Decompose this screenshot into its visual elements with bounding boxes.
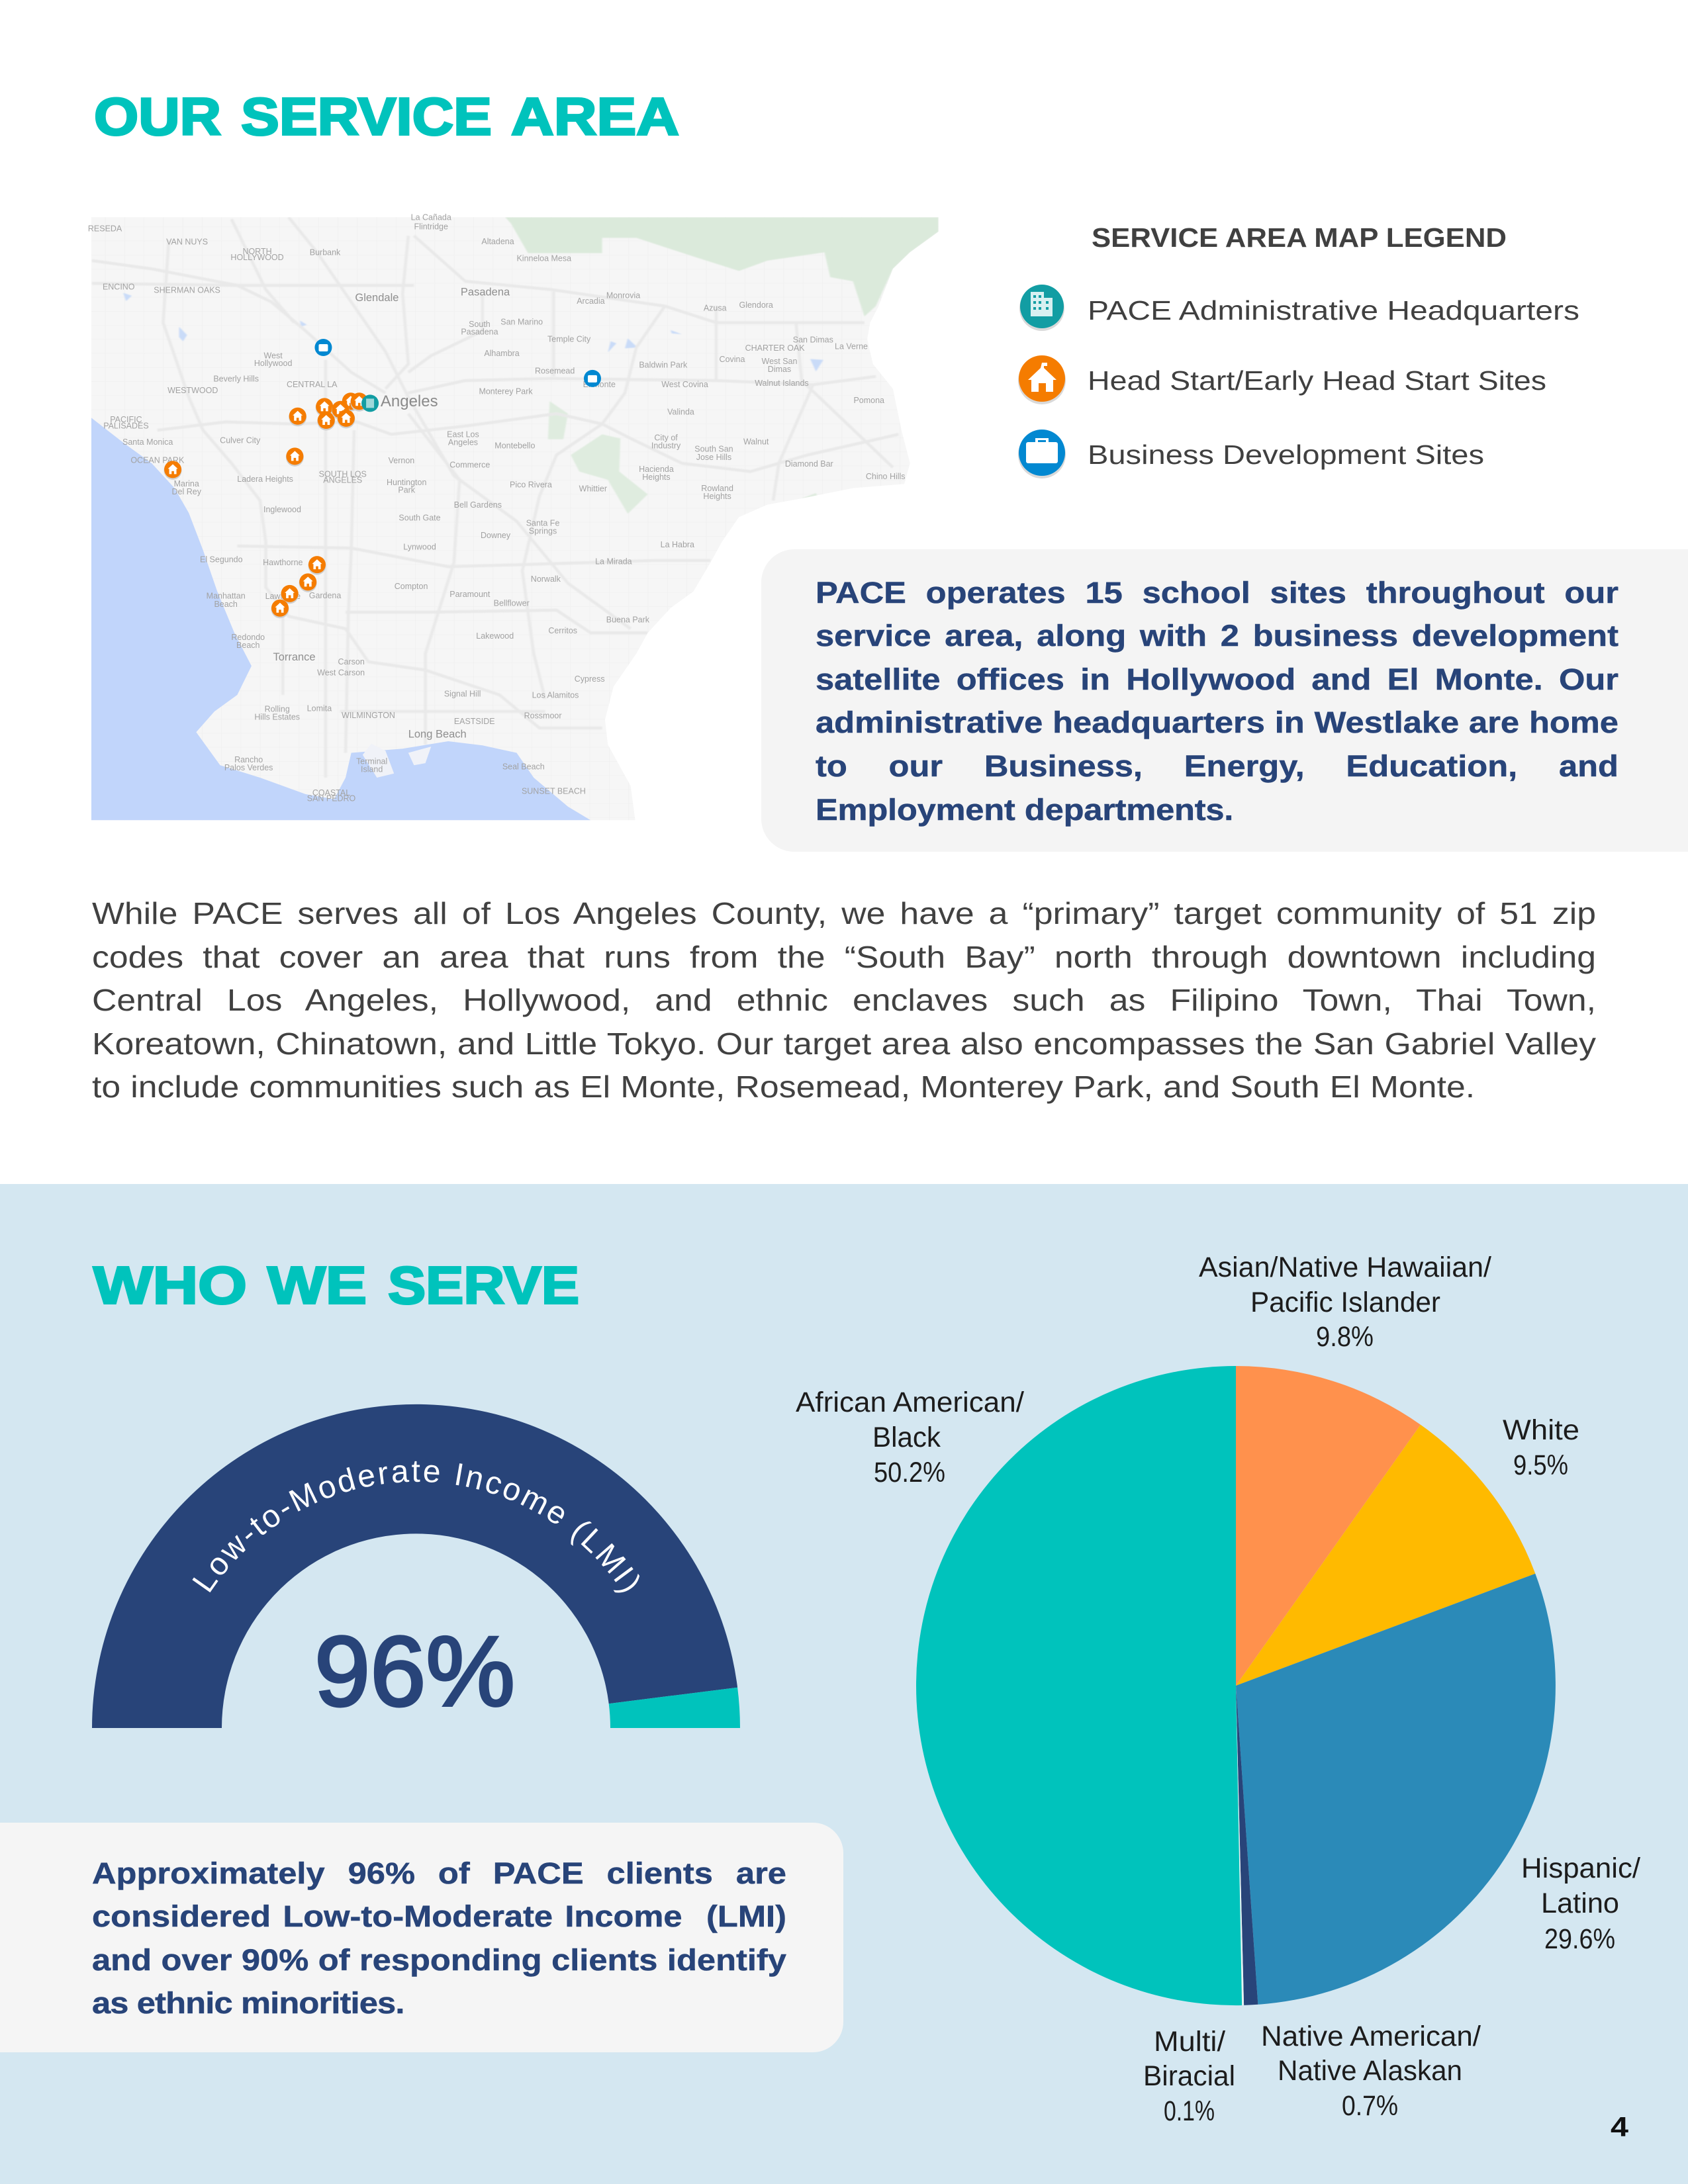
map place labels: Pomona: [853, 396, 884, 405]
title: our service area: OUR: [94, 87, 221, 146]
map place labels: SHERMAN OAKS: [154, 285, 220, 295]
map place labels: Norwalk: [531, 574, 561, 584]
pie labels: [796, 1251, 1640, 2127]
map place labels: Lakewood: [476, 631, 514, 641]
legend label: head start: Head Start/Early Head Start Sites: [1088, 365, 1546, 396]
map place labels: RESEDA: [88, 224, 122, 233]
map place labels: Altadena: [481, 237, 514, 246]
label: african american: 50.2%: [874, 1457, 945, 1488]
legend label: business development: Business Development Sites: [1088, 439, 1484, 470]
text: service area description: codes that cover an area that runs from the “South Bay” north through downtown including: [92, 940, 1596, 974]
map place labels: South Gate: [399, 513, 441, 522]
map pins: head start sites: [164, 392, 368, 618]
map place labels: PACIFIC: [110, 415, 142, 424]
map place labels: Heights: [642, 473, 671, 482]
map place labels: SOUTH LOS: [319, 470, 367, 479]
map place labels: Downey: [481, 531, 511, 540]
map place labels: CHARTER OAK: [745, 343, 805, 353]
gauge curved label: Low-to-Moderate Income (LMI): [192, 1461, 639, 1592]
map place labels: Azusa: [704, 303, 727, 312]
label: multi: Multi/: [1154, 2026, 1225, 2058]
map place labels: Manhattan: [207, 591, 246, 600]
text: service area description: Central Los Angeles, Hollywood, and ethnic enclaves such as Filipino Town, Thai Town,: [92, 983, 1596, 1017]
map place labels: Montebello: [494, 441, 535, 451]
legend icon: headquarters building: [1019, 285, 1064, 331]
map place labels: Industry: [651, 441, 681, 451]
text: service area description: Koreatown, Chinatown, and Little Tokyo. Our target area also encompasses the San Gabriel Valley: [92, 1026, 1596, 1061]
map place labels: Temple City: [547, 334, 591, 343]
map place labels: Santa Monica: [122, 437, 173, 447]
map place labels: Monterey Park: [479, 387, 533, 396]
text: pace operates: satellite offices in Hollywood and El Monte. Our: [816, 662, 1618, 696]
map place labels: Beverly Hills: [213, 374, 259, 383]
map place labels: Los Angeles: [352, 392, 438, 410]
label: african american: African American/: [796, 1387, 1024, 1418]
map place labels: Rowland: [701, 484, 733, 493]
map place labels: Dimas: [768, 365, 791, 374]
map pin: headquarters: [361, 394, 379, 412]
map place labels: Island: [361, 764, 383, 774]
text: lmi callout: [92, 1856, 786, 2020]
title: our service area: SERVICE: [241, 87, 492, 146]
map place labels: Park: [398, 485, 416, 494]
label: asian: [1199, 1251, 1491, 1353]
label: native american: 0.7%: [1342, 2090, 1398, 2122]
map place labels: Cypress: [575, 674, 605, 684]
title: our service area: AREA: [511, 87, 679, 146]
panel: lmi callout: [0, 1823, 843, 2052]
title: who we serve: WHO: [93, 1256, 247, 1314]
label: native american: Native Alaskan: [1278, 2055, 1462, 2087]
map place labels: ENCINO: [103, 282, 135, 292]
label: hispanic: Hispanic/: [1521, 1852, 1640, 1884]
map place labels: Chino Hills: [866, 472, 906, 481]
map place labels: San Dimas: [793, 335, 833, 345]
gauge: low-to-moderate income 96%: [92, 1404, 740, 1728]
map: service area: [88, 212, 941, 821]
map place labels: Whittier: [579, 484, 607, 494]
map place labels: La Habra: [661, 540, 694, 549]
map place labels: HOLLYWOOD: [230, 253, 284, 262]
map place labels: EASTSIDE: [454, 717, 495, 726]
panel: pace operates: [761, 549, 1688, 852]
map place labels: COASTAL: [312, 788, 350, 797]
text: lmi callout: and over 90% of responding clients identify: [92, 1943, 786, 1977]
label: asian: Pacific Islander: [1250, 1287, 1440, 1318]
map place labels: Long Beach: [408, 728, 467, 740]
map place labels: Flintridge: [414, 222, 448, 231]
pie chart: client ethnicity: [916, 1366, 1556, 2005]
map place labels: Ladera Heights: [237, 475, 293, 484]
map place labels: East Los: [447, 430, 479, 439]
map place labels: Pasadena: [461, 286, 510, 298]
legend: service area map: [1018, 222, 1579, 478]
map place labels: San Marino: [500, 318, 543, 327]
label: native american: [1261, 2021, 1481, 2122]
map place labels: Los Alamitos: [532, 690, 579, 700]
map place labels: Bellflower: [494, 599, 530, 608]
map place labels: VAN NUYS: [166, 237, 208, 246]
map place labels: Marina: [174, 479, 199, 488]
map place labels: WESTWOOD: [167, 386, 218, 395]
map place labels: NORTH: [242, 247, 272, 256]
map place labels: Glendale: [355, 292, 399, 304]
map place labels: Monrovia: [606, 291, 640, 300]
map place labels: Walnut: [743, 437, 769, 446]
label: african american: [796, 1387, 1024, 1488]
map place labels: La Verne: [835, 341, 868, 351]
label: hispanic: Latino: [1541, 1888, 1619, 1919]
label: white: White: [1503, 1414, 1579, 1446]
map place labels: Hills Estates: [254, 712, 300, 722]
map place labels: Walnut Islands: [755, 379, 809, 388]
map pins: business development sites: [314, 339, 601, 387]
map place labels: Rolling: [265, 705, 290, 714]
map place labels: Torrance: [273, 651, 316, 663]
map place labels: South San: [694, 444, 733, 454]
text: pace operates: PACE operates 15 school sites throughout our: [816, 576, 1618, 610]
map place labels: Pasadena: [461, 328, 498, 337]
map place labels: Burbank: [310, 248, 341, 257]
map place labels: Covina: [720, 355, 745, 364]
title: who we serve: WE: [267, 1256, 367, 1314]
map place labels: SAN PEDRO: [307, 794, 356, 803]
map place labels: Carson: [338, 657, 365, 666]
text: pace operates: [816, 576, 1618, 827]
map place labels: Alhambra: [484, 349, 520, 358]
map place labels: West San: [762, 357, 797, 366]
label: asian: Asian/Native Hawaiian/: [1199, 1251, 1491, 1283]
map place labels: Del Rey: [172, 487, 202, 496]
map place labels: Pico Rivera: [510, 480, 552, 489]
label: african american: Black: [872, 1422, 941, 1453]
map place labels: City of: [654, 433, 678, 443]
map place labels: Paramount: [449, 590, 491, 599]
map place labels: SUNSET BEACH: [522, 786, 586, 796]
map place labels: Lynwood: [403, 543, 436, 552]
map place labels: Angeles: [448, 437, 478, 447]
text: pace operates: administrative headquarters in Westlake are home: [816, 705, 1618, 739]
map place labels: West: [264, 351, 283, 360]
label: hispanic: [1521, 1852, 1640, 1955]
title: who we serve: [93, 1256, 579, 1314]
map place labels: Diamond Bar: [785, 459, 833, 469]
text: pace operates: to our Business, Energy, Education, and: [816, 749, 1618, 783]
map place labels: Beach: [214, 600, 238, 609]
label: hispanic: 29.6%: [1544, 1923, 1615, 1955]
label: white: 9.5%: [1513, 1449, 1568, 1481]
map place labels: Gardena: [309, 591, 341, 600]
text: lmi callout: as ethnic minorities.: [92, 1986, 404, 2020]
label: native american: Native American/: [1261, 2021, 1481, 2052]
map place labels: Compton: [395, 582, 428, 591]
map place labels: Jose Hills: [696, 453, 731, 462]
map place labels: Culver City: [220, 435, 261, 445]
map place labels: CENTRAL LA: [287, 380, 338, 389]
map place labels: Rossmoor: [524, 711, 561, 721]
map place labels: Lawndale: [265, 592, 301, 601]
map place labels: Cerritos: [548, 626, 577, 635]
map place labels: OCEAN PARK: [130, 455, 185, 465]
map place labels: Springs: [529, 526, 557, 535]
map place labels: Vernon: [389, 456, 414, 465]
map place labels: Buena Park: [606, 615, 650, 625]
title: our service area: [94, 87, 679, 146]
map place labels: West Carson: [317, 668, 365, 678]
map place labels: El Monte: [583, 380, 616, 389]
map place labels: WILMINGTON: [342, 711, 395, 720]
legend heading: SERVICE AREA MAP LEGEND: [1092, 222, 1507, 253]
map place labels: Redondo: [231, 633, 265, 642]
map place labels: Bell Gardens: [454, 500, 502, 510]
map place labels: Hawthorne: [263, 558, 303, 567]
map place labels: Beach: [236, 641, 260, 650]
gauge value: 96%: [314, 1615, 515, 1727]
text: lmi callout: Approximately 96% of PACE clients are: [92, 1856, 786, 1890]
text: lmi callout: considered Low-to-Moderate Income (LMI): [92, 1899, 786, 1933]
map place labels: Valinda: [667, 407, 694, 416]
map place labels: ANGELES: [323, 475, 362, 484]
map place labels: Kinneloa Mesa: [516, 253, 571, 263]
map place labels: PALISADES: [103, 421, 149, 431]
map place labels: [88, 212, 906, 803]
label: asian: 9.8%: [1316, 1321, 1374, 1353]
map place labels: Palos Verdes: [224, 763, 273, 772]
map place labels: La Cañada: [411, 212, 451, 222]
text: pace operates: Employment departments.: [816, 793, 1233, 827]
map place labels: La Mirada: [595, 557, 632, 567]
map place labels: Seal Beach: [502, 762, 545, 772]
map place labels: West Covina: [661, 380, 708, 389]
text: service area description: While PACE serves all of Los Angeles County, we have a “primary” target community of 51 zip: [92, 896, 1596, 931]
text: service area description: to include communities such as El Monte, Rosemead, Monterey Park, and South El Monte.: [92, 1069, 1475, 1104]
page number: 4: [1611, 2111, 1629, 2142]
map place labels: Lomita: [307, 704, 332, 713]
map place labels: Inglewood: [263, 505, 301, 514]
map place labels: Terminal: [356, 756, 387, 766]
map place labels: Arcadia: [577, 296, 605, 306]
map place labels: Commerce: [449, 460, 490, 469]
map place labels: Glendora: [739, 300, 773, 310]
map place labels: South: [469, 320, 491, 329]
legend icon: school house: [1018, 355, 1066, 404]
map place labels: Signal Hill: [444, 689, 481, 699]
map place labels: Hacienda: [639, 465, 674, 474]
map place labels: Rosemead: [535, 366, 575, 375]
label: multi: 0.1%: [1164, 2095, 1215, 2127]
legend label: headquarters: PACE Administrative Headquarters: [1088, 295, 1579, 326]
text: pace operates: service area, along with 2 business development: [816, 619, 1618, 653]
title: who we serve: SERVE: [388, 1256, 579, 1314]
text: service area description: [92, 896, 1596, 1104]
map place labels: Heights: [703, 492, 731, 501]
map place labels: Santa Fe: [526, 518, 559, 527]
map place labels: Rancho: [234, 755, 263, 764]
label: multi: Biracial: [1143, 2060, 1235, 2092]
map place labels: Huntington: [387, 478, 426, 487]
label: white: [1503, 1414, 1579, 1481]
section background: who we serve: [0, 1184, 1688, 2184]
legend icon: briefcase: [1018, 430, 1066, 478]
label: multi: [1143, 2026, 1235, 2127]
map place labels: Hollywood: [254, 359, 292, 368]
map place labels: El Segundo: [200, 555, 243, 564]
map place labels: Baldwin Park: [639, 361, 688, 370]
